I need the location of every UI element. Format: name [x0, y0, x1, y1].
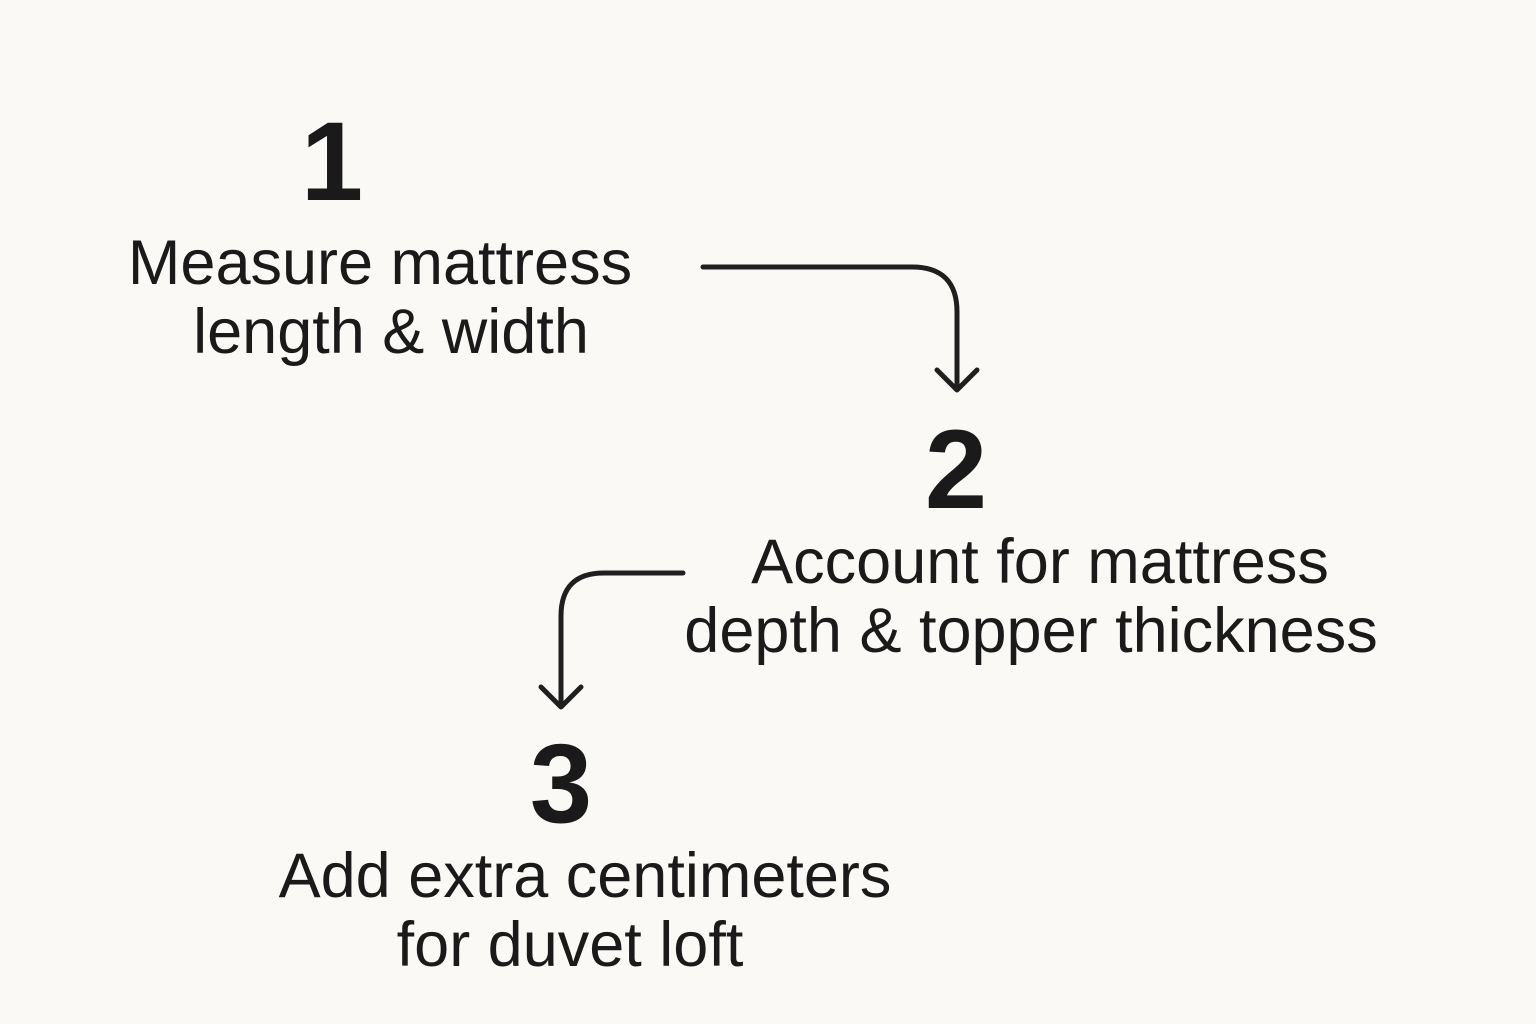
step 1 text: Measure mattress [128, 228, 632, 298]
step 3 text: Add extra centimeters [279, 841, 891, 911]
step 1 text: length & width [193, 297, 589, 367]
step 2 text: Account for mattress [751, 527, 1329, 597]
arrow: step 2 to step 3 [541, 573, 683, 707]
step 1 [128, 99, 632, 367]
number 1: 1 [301, 99, 363, 224]
step 2 [684, 407, 1378, 666]
step 3 [279, 721, 891, 980]
step 2 text: depth & topper thickness [684, 596, 1378, 666]
step 3 text: for duvet loft [397, 910, 744, 980]
number 3: 3 [530, 721, 592, 846]
number 2: 2 [925, 407, 987, 532]
arrow: step 1 to step 2 [703, 267, 977, 390]
